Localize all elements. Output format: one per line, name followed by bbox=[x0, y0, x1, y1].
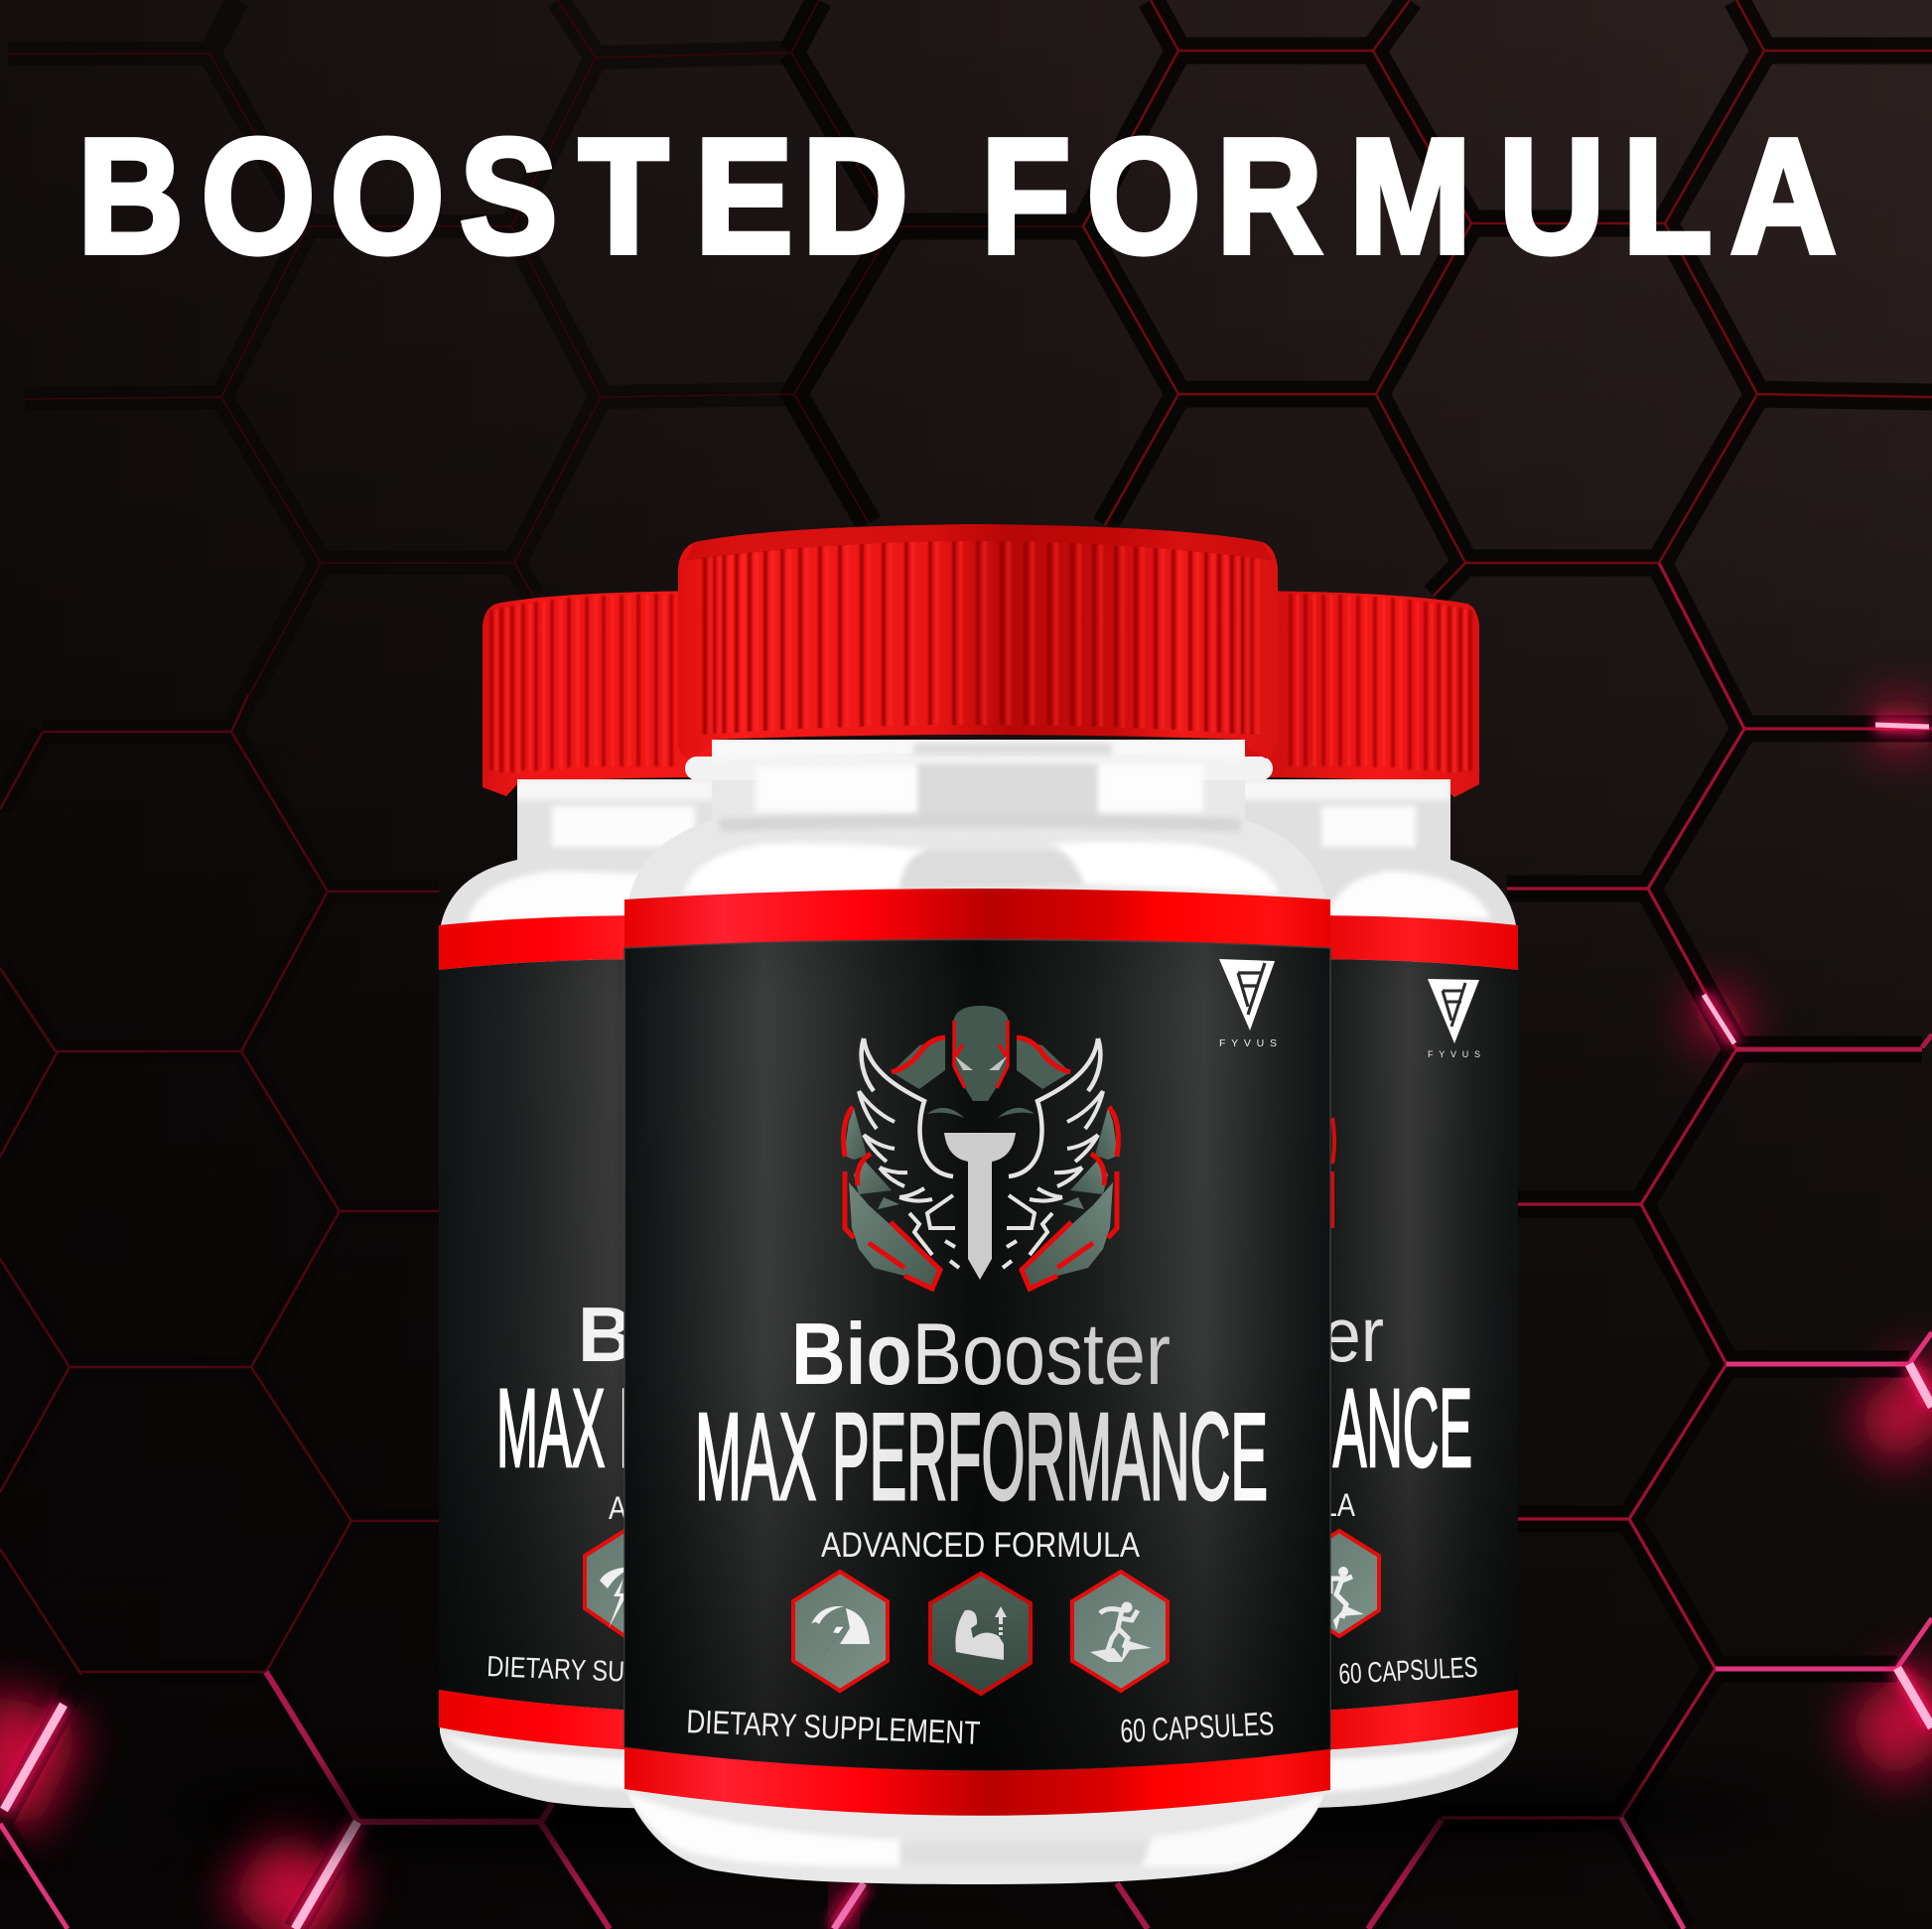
bottle: back left bbox=[439, 591, 715, 1809]
FYVUS brand mark bbox=[1219, 959, 1277, 1049]
left bottle hexagon icon bbox=[583, 1529, 623, 1638]
background glow halos bbox=[0, 725, 1932, 1929]
glowing neon segments bbox=[4, 725, 1932, 1929]
right bottle capsule count: 60 CAPSULES bbox=[1338, 1652, 1478, 1691]
infographic canvas: MAX PERFORMANCE bbox=[496, 1366, 1009, 1490]
red seams: top right bbox=[1083, 0, 1932, 596]
left bottle label bbox=[439, 915, 624, 1749]
front bottle label bbox=[624, 889, 1330, 1816]
right bottle brand: BioBooster bbox=[1044, 1291, 1384, 1378]
emblem head bbox=[953, 1006, 1009, 1101]
front bottle label: MAX PERFORMANCE bbox=[695, 1389, 1268, 1526]
left bottle dietary text: DIETARY SUPPLEMENT bbox=[486, 1651, 752, 1694]
red seams: left column bbox=[0, 695, 440, 1675]
brand name: BioBooster bbox=[791, 1305, 1171, 1403]
right bottle FYVUS mark bbox=[1428, 979, 1480, 1059]
right bottle body bbox=[1241, 779, 1518, 1809]
top red band bbox=[624, 889, 1330, 948]
icon: energy arch and lightning bbox=[793, 1572, 888, 1691]
black label panel bbox=[624, 939, 1330, 1771]
left bottle sub-title: ADVANCED FORMULA bbox=[609, 1490, 897, 1526]
bottle: front centre bbox=[624, 524, 1330, 1884]
icon: flexed bicep with arrow bbox=[930, 1574, 1031, 1694]
left bottle body bbox=[440, 779, 715, 1809]
left bottle cap bbox=[483, 591, 715, 796]
capsule count text: 60 CAPSULES bbox=[1119, 1705, 1275, 1749]
red seams: right column bbox=[1442, 563, 1932, 1818]
right bottle cap bbox=[1241, 591, 1479, 797]
floor shadow bbox=[164, 1770, 1792, 1854]
warrior emblem bbox=[844, 1006, 1118, 1289]
right bottle FYVUS mark: FYVUS bbox=[1428, 1049, 1480, 1059]
bottle: back right bbox=[1241, 591, 1518, 1808]
right bottle hexagon icon bbox=[1300, 1531, 1379, 1636]
honeycomb grooves: upper right bbox=[791, 0, 1932, 1929]
honeycomb grooves: left bbox=[0, 0, 1442, 1929]
pink seams bbox=[1736, 1034, 1932, 1049]
front bottle body bbox=[626, 735, 1325, 1884]
left bottle brand: B bbox=[578, 1291, 633, 1378]
dietary supplement text: DIETARY SUPPLEMENT bbox=[686, 1703, 981, 1751]
right bottle label bbox=[960, 915, 1518, 1751]
faint red seams: top left bbox=[8, 0, 1083, 695]
advanced formula sub-title: ADVANCED FORMULA bbox=[821, 1526, 1141, 1565]
FYVUS brand mark: FYVUS bbox=[1219, 1037, 1277, 1049]
front bottle cap bbox=[678, 524, 1278, 758]
emblem sword bbox=[944, 1133, 1016, 1280]
icon: running figure bbox=[1072, 1572, 1168, 1691]
right bottle sub-title: ADVANCED FORMULA bbox=[1068, 1487, 1356, 1523]
right bottle emblem sliver bbox=[1332, 1118, 1334, 1228]
title: BOOSTED FORMULA bbox=[77, 106, 1837, 288]
bottom red band bbox=[624, 1747, 1330, 1816]
